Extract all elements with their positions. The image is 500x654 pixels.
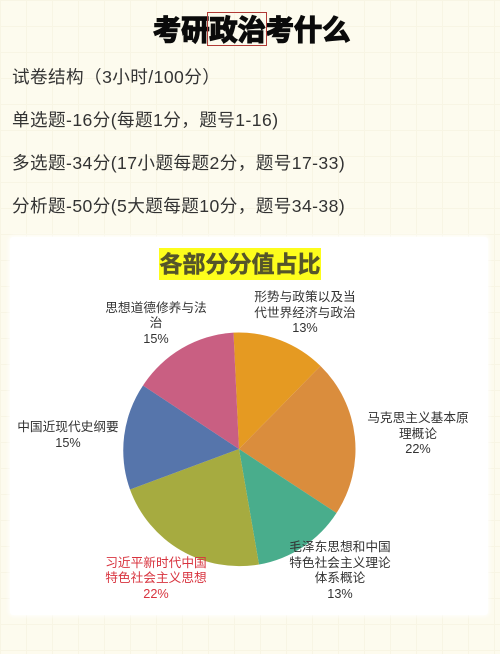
label: current politics: [254, 290, 356, 335]
label: modern history: 中国近现代史纲要: [17, 420, 119, 434]
text: multiple choice: 多选题-34分(17小题每题2分，题号17-33): [12, 153, 345, 173]
text: analysis questions: 分析题-50分(5大题每题10分，题号34-38): [12, 196, 345, 216]
label: Marxism: 理概论: [399, 426, 437, 440]
label: ethics and law: [105, 300, 207, 346]
slice: modern history 15%: [123, 386, 239, 490]
label: Xi thought: 22%: [143, 586, 169, 600]
slice: politics 13%: [234, 332, 320, 449]
label: Mao thought: 毛泽东思想和中国: [289, 540, 391, 554]
label: modern history: [17, 420, 119, 450]
label: Marxism: 22%: [405, 442, 431, 456]
text: single choice: 单选题-16分(每题1分，题号1-16): [12, 110, 278, 130]
text: exam structure: 试卷结构（3小时/100分）: [12, 67, 220, 87]
label: ethics and law: 思想道德修养与法: [105, 300, 207, 314]
label: ethics and law: 15%: [143, 332, 169, 346]
slice: Mao thought 13%: [239, 449, 336, 564]
label: ethics and law: 治: [150, 316, 162, 330]
label: Mao thought: [289, 540, 391, 600]
label: Mao thought: 特色社会主义理论: [289, 556, 391, 570]
label: modern history: 15%: [55, 436, 81, 450]
slice: ethics and law 15%: [143, 333, 239, 449]
label: current politics: 形势与政策以及当: [254, 290, 356, 304]
label: Mao thought: 体系概论: [315, 571, 365, 585]
label: Marxism: [367, 411, 469, 456]
label: Xi thought: 特色社会主义思想: [105, 571, 207, 585]
slice: Marxism 22%: [239, 366, 355, 513]
title: 考研政治考什么: [153, 14, 350, 46]
title highlight box: [207, 12, 267, 46]
label: Marxism: 马克思主义基本原: [367, 411, 469, 425]
chart title: 各部分分值占比: [160, 251, 320, 277]
slice: Xi thought 22%: [130, 449, 259, 566]
label: Xi thought: 习近平新时代中国: [105, 556, 207, 570]
label: current politics: 13%: [292, 321, 318, 335]
label: current politics: 代世界经济与政治: [254, 306, 356, 320]
label: Mao thought: 13%: [327, 586, 353, 600]
panel: score share chart: [10, 237, 488, 615]
label: Xi thought: [105, 556, 207, 600]
